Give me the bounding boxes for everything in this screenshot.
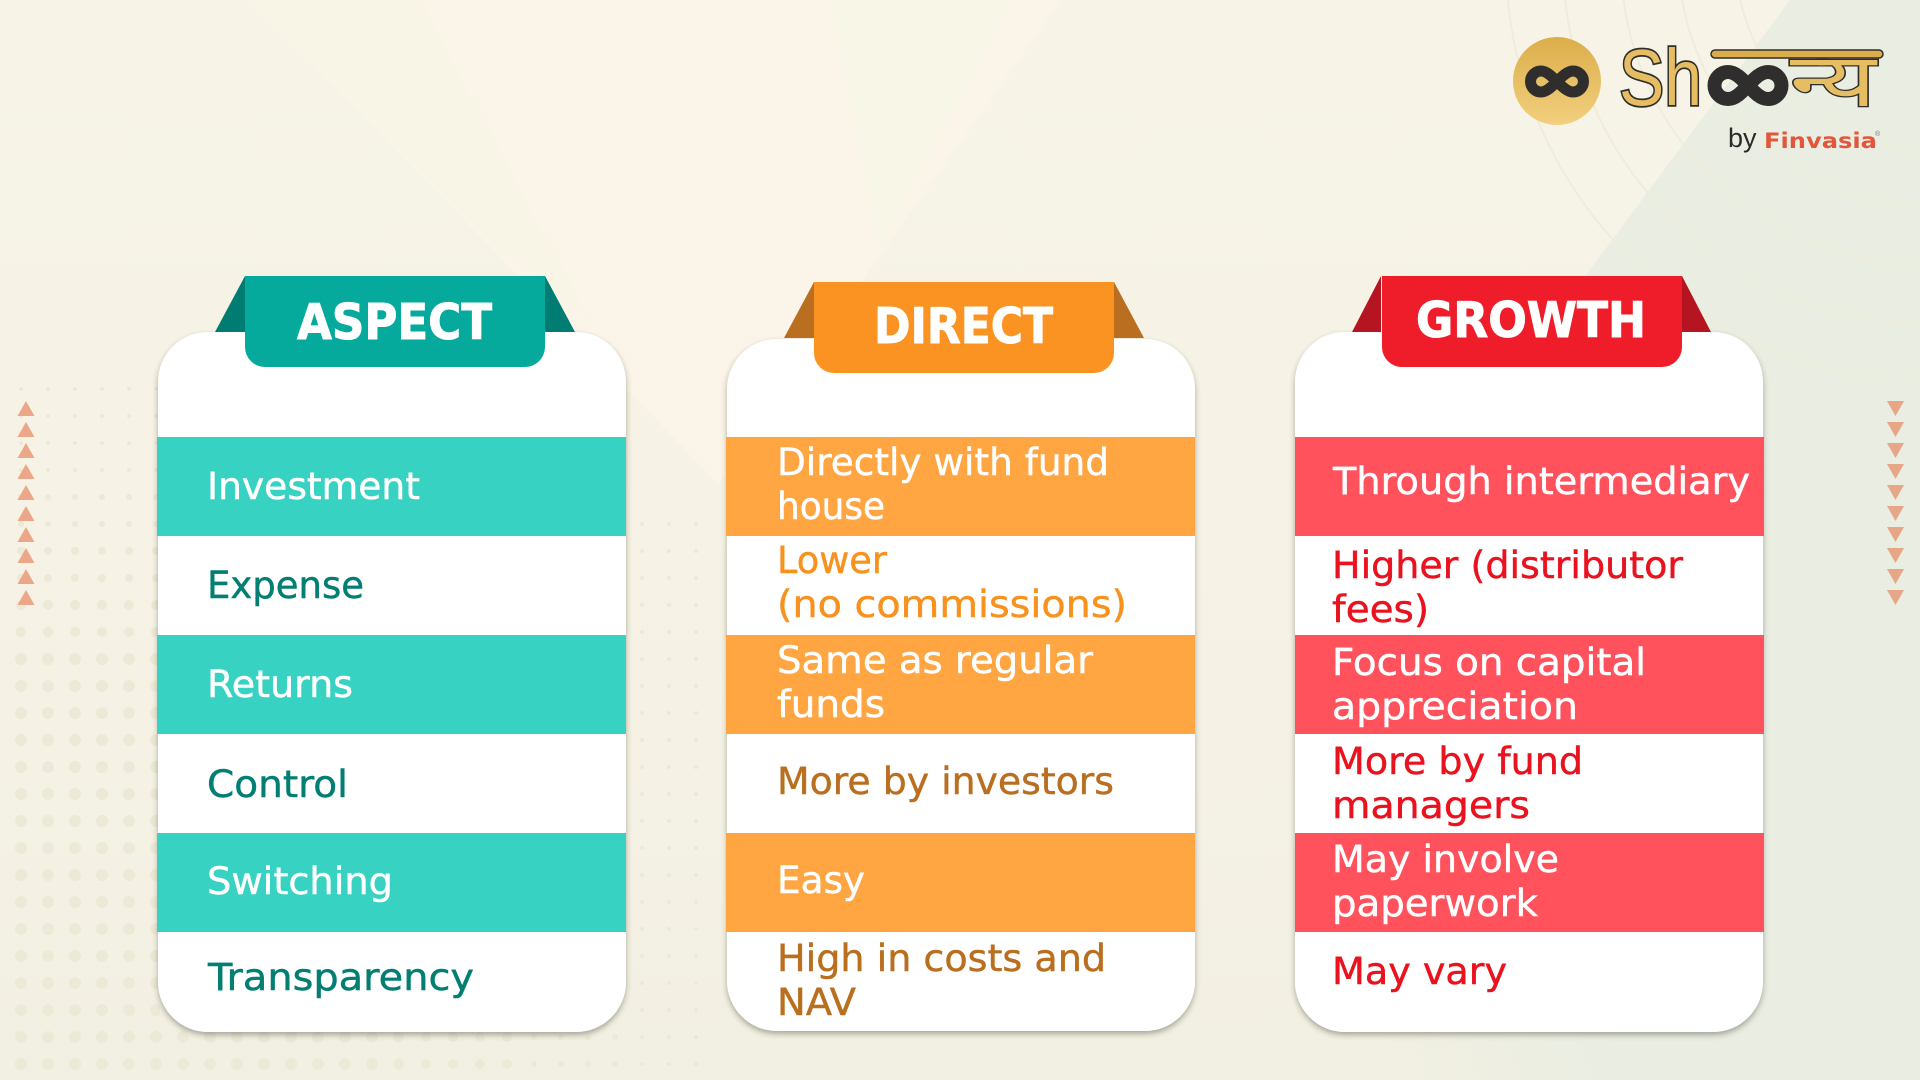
icon: column of upward triangles (18, 401, 34, 605)
row: Through intermediary: Through intermediary (1332, 460, 1750, 503)
row: More by fund managers (1332, 740, 1583, 827)
row: Expense: Expense (207, 564, 364, 607)
row: Same as regular funds: Same as regular (777, 639, 1094, 682)
row: May vary: May vary (1332, 950, 1507, 993)
row: Same as regular funds (726, 635, 1195, 734)
row: May involve paperwork (1295, 833, 1764, 932)
row: Investment (157, 437, 626, 536)
row: Same as regular funds: funds (777, 683, 885, 726)
heading: DIRECT (784, 282, 1144, 373)
heading: ASPECT: ASPECT (297, 294, 493, 351)
heading: DIRECT: DIRECT (874, 298, 1054, 355)
logo wordmark (1619, 21, 1883, 128)
row: May involve paperwork: May involve (1332, 838, 1559, 881)
row: High in costs and NAV: High in costs and (777, 937, 1106, 980)
row: Focus on capital appreciation: appreciation (1332, 685, 1578, 728)
row: Control: Control (207, 763, 348, 806)
row: Higher (distributor fees): fees) (1332, 588, 1429, 631)
row: Higher (distributor fees) (1332, 544, 1684, 631)
panel: growth column (1295, 276, 1764, 1032)
row: Higher (distributor fees): Higher (distributor (1332, 544, 1684, 587)
row: Directly with fund house (726, 437, 1195, 536)
row: Transparency: Transparency (207, 956, 474, 999)
logo wordmark: न्य (1790, 21, 1877, 128)
row: Through intermediary (1295, 437, 1764, 536)
row: More by fund managers: More by fund (1332, 740, 1583, 783)
row: Switching (157, 833, 626, 932)
logo byline: ® (1875, 130, 1881, 138)
logo byline: Finvasia (1764, 129, 1877, 153)
row: Lower (no commissions): (no commissions) (777, 583, 1127, 626)
row: Returns (157, 635, 626, 734)
logo byline: by (1728, 123, 1757, 153)
heading: GROWTH (1352, 276, 1711, 367)
logo: Shoonya by Finvasia (1513, 21, 1883, 153)
heading: GROWTH: GROWTH (1416, 292, 1646, 349)
panel: aspect column (157, 276, 626, 1032)
row: Easy (726, 833, 1195, 932)
row: Directly with fund house: house (777, 485, 885, 528)
row: Lower (no commissions) (777, 539, 1127, 626)
row: Lower (no commissions): Lower (777, 539, 888, 582)
icon: gold infinity coin (1513, 37, 1601, 125)
panel: direct column (726, 282, 1195, 1031)
heading: ASPECT (215, 276, 575, 367)
row: Focus on capital appreciation (1295, 635, 1764, 734)
row: More by fund managers: managers (1332, 784, 1530, 827)
row: May involve paperwork: paperwork (1332, 882, 1539, 925)
row: Returns: Returns (207, 663, 353, 706)
row: Easy: Easy (777, 859, 865, 902)
row: High in costs and NAV: NAV (777, 981, 856, 1024)
row: High in costs and NAV (777, 937, 1106, 1024)
row: Focus on capital appreciation: Focus on capital (1332, 641, 1646, 684)
row: Investment: Investment (207, 465, 420, 508)
logo wordmark: Sh (1619, 33, 1702, 122)
row: Switching: Switching (207, 860, 393, 903)
logo byline (1728, 123, 1881, 153)
row: Directly with fund house: Directly with fund (777, 441, 1109, 484)
icon: column of downward triangles (1887, 401, 1904, 605)
row: More by investors: More by investors (777, 760, 1114, 803)
